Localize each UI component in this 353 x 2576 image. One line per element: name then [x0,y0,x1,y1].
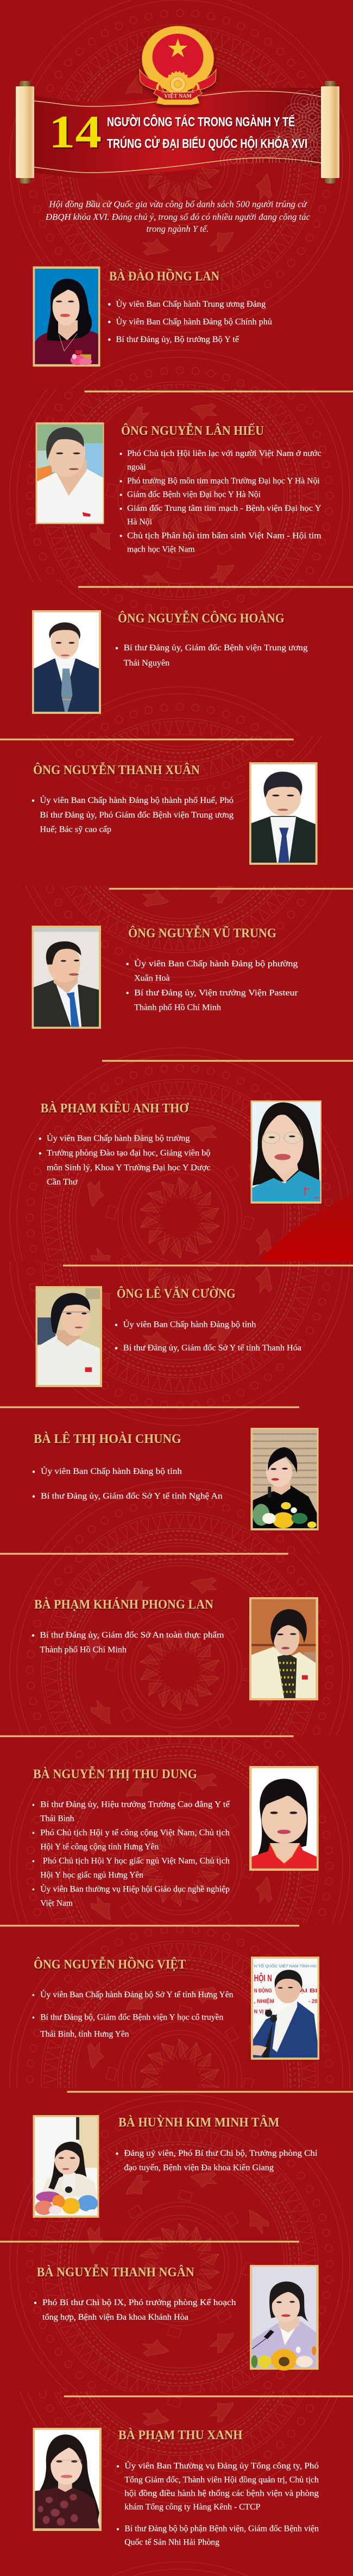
bullet list: ngoài [127,463,146,472]
bullet list [117,2460,319,2547]
bullet list: Phó Chủ tịch Hội liên lạc với người Việt Nam ở nước [127,449,322,458]
bullet list: Bí thư Đảng ủy, Giám đốc Sở Y tế tỉnh Nghệ An [41,1492,223,1501]
panel: Bà Đào Hồng Lan [33,267,272,366]
bullet list: Bí thư Đảng bộ bộ phận Bệnh viện, Giám đốc Bệnh viện [124,2524,319,2534]
photo: Huỳnh Kim Minh Tâm [33,2115,99,2218]
title [107,114,307,151]
name: ÔNG NGUYỄN VŨ TRUNG [128,926,276,941]
bullet list: Bí thư Đảng ủy, Bộ trưởng Bộ Y tế [116,335,239,344]
bullet list: Thái Nguyên [124,659,169,668]
panel: Bà Phạm Khánh Phong Lan [32,1597,318,1700]
photo: Nguyễn Hồng Việt: HỘI N [254,1972,272,1984]
panel: Bà Lê Thị Hoài Chung [33,1428,319,1530]
bullet list: Ủy viên Ban Thường vụ Đảng ủy Tổng công ty, Phó [124,2460,319,2471]
panel: Ông Nguyễn Công Hoàng [32,610,308,714]
name: BÀ PHẠM THU XANH [118,2428,243,2442]
bullet list: Ủy viên Ban Chấp hành Trung ương Đảng [116,299,266,309]
bullet list: Bí thư Đảng ủy, Giám đốc Sở Y tế tỉnh Thanh Hóa [123,1344,301,1353]
panel: Ông Nguyễn Thanh Xuân [32,762,318,865]
bullet list: Ủy viên Ban Chấp hành Đảng bộ trường [47,1133,190,1143]
photo: Lê Văn Cường [36,1286,102,1387]
name: BÀ NGUYỄN THỊ THU DUNG [33,1767,197,1782]
photo: Lê Thị Hoài Chung [251,1428,319,1530]
bullet list: Chủ tịch Phân hội tim bẩm sinh Việt Nam - Hội tim [127,531,322,540]
bullet list: Xuân Hoà [134,974,170,983]
photo: Nguyễn Công Hoàng [32,610,101,714]
bullet list: khám Tổng công ty Hàng Kênh - CTCP [124,2503,260,2512]
bullet list: Bí thư Đảng ủy, Hiệu trưởng Trường Cao đẳng Y tế [40,1800,230,1809]
name: BÀ LÊ THỊ HOÀI CHUNG [34,1432,181,1446]
bullet list: tổng hợp, Bệnh viện Đa khoa Khánh Hòa [42,2313,188,2322]
bullet list: Phó Bí thư Chi bộ IX, Phó trưởng phòng Kế hoạch [42,2298,236,2307]
icon: national emblem [140,26,216,105]
bullet list: Thái Bình [40,1814,74,1823]
icon: national emblem: VIỆT NAM [164,92,192,99]
photo: Nguyễn Hồng Việt: ẠI BI [299,1988,318,1994]
intro paragraph: Hội đồng Bầu cử Quốc gia vừa công bố danh sách 500 người trúng cử [48,199,307,210]
photo: Nguyễn Thanh Xuân [249,762,318,865]
icon: national emblem: CỘNG HÒA XÃ HỘI CHỦ NGHĨA [162,91,194,93]
bullet list: Việt Nam [40,1898,73,1908]
panel: Bà Nguyễn Thanh Ngân [34,2264,319,2371]
title: NGƯỜI CÔNG TÁC TRONG NGÀNH Y TẾ [107,114,295,129]
bullet list: Thành phố Hồ Chí Minh [40,1645,127,1654]
scroll ribbon [34,88,333,178]
header banner scroll [16,26,339,183]
bullet list: Phó trưởng Bộ môn tim mạch Trường Đại học Y Hà Nội [127,477,320,486]
bullet list [33,1989,233,2039]
bullet list [126,958,298,1012]
name: ÔNG NGUYỄN HỒNG VIỆT [34,1957,186,1972]
bullet list: Bí thư Đảng ủy, Giám đốc Bệnh viện Trung ương [124,643,308,653]
bullet list: Giám đốc Trung tâm tim mạch - Bệnh viện Đại học Y [127,504,322,513]
bullet list: môn Sinh lý, Khoa Y Trường Đại học Y Dược [47,1163,211,1172]
bullet list: Huế; Bác sỹ cao cấp [40,825,111,834]
bullet list: Tổng Giám đốc, Thành viên Hội đồng quản trị, Chủ tịch [124,2475,319,2484]
bullet list: đạo tuyến, Bệnh viện Đa khoa Kiên Giang [124,2163,274,2172]
name: ÔNG NGUYỄN THANH XUÂN [33,762,200,777]
bullet list: Bí thư Đảng ủy, Giám đốc Sở An toàn thực phẩm [40,1631,224,1640]
bullet list: Ủy viên Ban thường vụ Hiệp hội Giáo dục nghề nghiệp [40,1883,230,1894]
bullet list [32,1631,224,1654]
name: BÀ PHẠM KHÁNH PHONG LAN [34,1598,214,1612]
panel: Bà Nguyễn Thị Thu Dung [33,1766,319,1908]
bullet list [116,643,308,668]
bullet list: Phó Chủ tịch Hội Y học giấc ngủ Việt Nam, Chủ tịch [43,1856,230,1865]
bullet list [33,1800,230,1908]
bullet list [32,795,234,834]
bullet list [33,1466,223,1501]
bullet list [120,449,322,554]
intro paragraph: ĐBQH khóa XVI. Đáng chú ý, trong số đó có nhiều người đang công tác [45,212,310,222]
bullet list: Ủy viên Ban Chấp hành Đảng bộ tỉnh [41,1466,182,1476]
bullet list: Quốc tế Sản Nhi Hải Phòng [124,2538,219,2547]
panel: Ông Lê Văn Cường [36,1286,301,1387]
bullet list: Ủy viên Ban Chấp hành Đảng bộ Sở Y tế tỉnh Hưng Yên [40,1989,233,1999]
bullet list: Ủy viên Ban Chấp hành Đảng bộ thành phố Huế, Phó [40,795,234,805]
bullet list: Hội Y học giấc ngủ Hưng Yên [40,1870,143,1879]
bullet list: Cần Thơ [47,1178,78,1187]
bullet list [115,1319,301,1353]
photo: Nguyễn Hồng Việt: , NHIỆM [254,1998,274,2004]
photo: Nguyễn Thị Thu Dung [249,1766,319,1871]
bullet list: Bí thư Đảng ủy, Phó Giám đốc Bệnh viện Trung ương [40,811,234,820]
photo: Nguyễn Hồng Việt [251,1957,319,2060]
bullet list: Hội Y tế công cộng tỉnh Hưng Yên [40,1842,159,1851]
bullet list [39,1133,211,1187]
bullet list: Ủy viên Ban Chấp hành Đảng bộ phường [134,958,298,969]
name: BÀ PHẠM KIỀU ANH THƠ [41,1101,190,1116]
panel: Ông Nguyễn Hồng Việt [33,1957,319,2060]
name: BÀ NGUYỄN THANH NGÂN [37,2264,194,2280]
photo: Nguyễn Hồng Việt: N VỊ BẦ [254,2008,272,2015]
bullet list: Hà Nội [127,517,153,527]
name: BÀ ĐÀO HỒNG LAN [109,269,220,284]
bullet list [108,299,272,344]
intro paragraph: trong ngành Y tế. [147,224,209,234]
name: ÔNG NGUYỄN CÔNG HOÀNG [118,611,285,626]
name: ÔNG LÊ VĂN CƯỜNG [117,1287,236,1301]
photo: Nguyễn Hồng Việt: N ĐỘNG [254,1988,272,1994]
bullet list: Đảng uỷ viên, Phó Bí thư Chi bộ, Trưởng phòng Chỉ [124,2149,318,2158]
panel: Bà Phạm Kiều Anh Thơ [39,1100,322,1204]
bullet list: Thái Bình, tỉnh Hưng Yên [40,2029,129,2039]
bullet list: Giám đốc Bệnh viện Đại học Y Hà Nội [127,490,261,499]
photo: Nguyễn Vũ Trung [31,926,101,1029]
bullet list [116,2149,318,2172]
photo: Phạm Khánh Phong Lan [249,1597,318,1700]
intro paragraph [45,199,310,234]
bullet list: hội đồng điều hành hệ thống các bệnh viện và phòng [124,2489,319,2498]
photo: Phạm Thu Xanh [33,2428,102,2531]
photo: Đào Hồng Lan [33,267,100,366]
bullet list: Ủy viên Ban Chấp hành Đảng bộ tỉnh [123,1319,256,1330]
panel: Bà Huỳnh Kim Minh Tâm [33,2115,318,2218]
photo: Nguyễn Lân Hiếu [36,422,104,524]
photo: Phạm Kiều Anh Thơ [251,1100,322,1204]
scroll rollers [16,81,339,183]
bullet list: Thành phố Hồ Chí Minh [134,1003,221,1012]
name: BÀ HUỲNH KIM MINH TÂM [118,2115,279,2130]
bullet list: Trưởng phòng Đào tạo đại học, Giảng viên bộ [47,1149,211,1158]
name: ÔNG NGUYỄN LÂN HIẾU [121,423,264,438]
panel: Ông Nguyễn Lân Hiếu [36,422,322,554]
bullet list: Phó Chủ tịch Hội y tế công cộng Việt Nam, Chủ tịch [40,1828,230,1837]
bullet list: Bí thư Đảng ủy, Viện trưởng Viện Pasteur [134,988,298,997]
bullet list: mạch học Việt Nam [127,545,195,554]
bullet list: Bí thư Đảng bộ, Giám đốc Bệnh viện Y học cổ truyền [40,2012,223,2022]
bullet list: Ủy viên Ban Chấp hành Đảng bộ Chính phủ [116,317,272,327]
big number 14: 14 [49,105,102,157]
bullet list [34,2298,236,2322]
panel: Bà Phạm Thu Xanh [33,2428,319,2547]
panel: Ông Nguyễn Vũ Trung [31,926,298,1029]
photo: Nguyễn Thanh Ngân [250,2265,319,2371]
